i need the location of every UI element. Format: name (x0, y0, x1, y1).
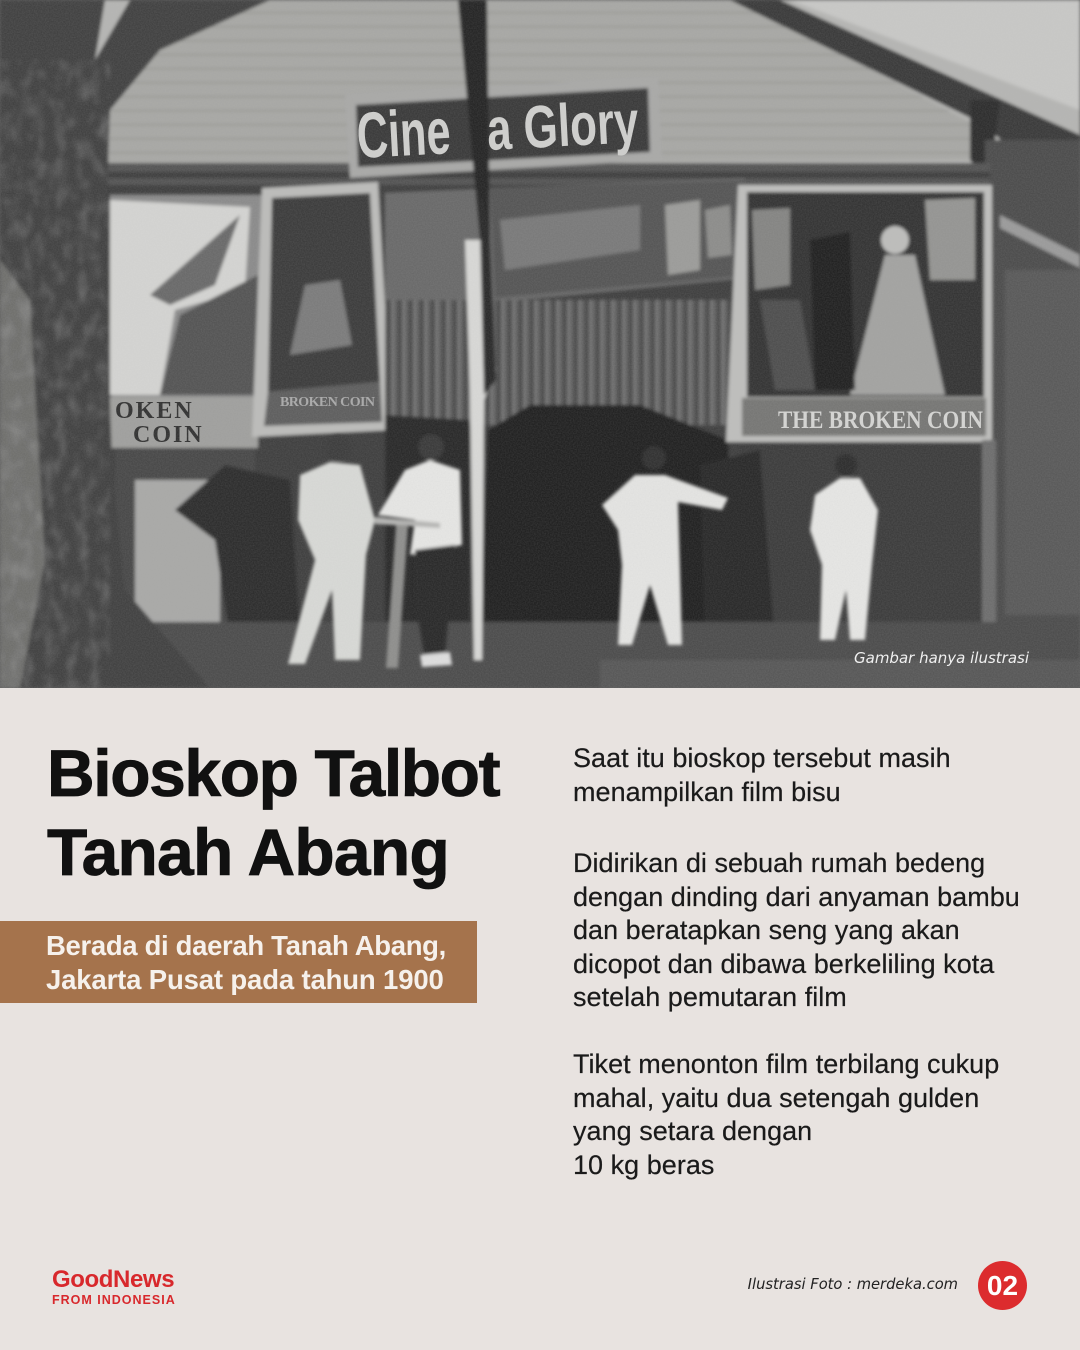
poster text: COIN (133, 422, 204, 448)
text block: ticket price: mahal, yaitu dua setengah gulden (573, 1083, 979, 1113)
photo credit: Ilustrasi Foto : merdeka.com (748, 1276, 958, 1293)
sign text (355, 89, 640, 172)
sign text: a Glory (485, 89, 640, 164)
text block: bamboo building (573, 848, 1020, 1012)
text block: silent film: menampilkan film bisu (573, 777, 841, 807)
sign (345, 77, 662, 178)
text block: ticket price: 10 kg beras (573, 1150, 714, 1180)
logo: GoodNews from Indonesia (52, 1266, 176, 1307)
text block: bamboo building: dicopot dan dibawa berkeliling kota (573, 949, 994, 979)
text block: silent film: Saat itu bioskop tersebut masih (573, 743, 951, 773)
poster text: OKEN (115, 398, 194, 424)
roof (730, 0, 1080, 215)
eaves (105, 163, 990, 187)
title: Tanah Abang (47, 815, 449, 889)
page number badge (978, 1261, 1027, 1310)
subtitle band: Berada di daerah Tanah Abang, (46, 930, 446, 961)
sign text: Cine (355, 94, 452, 172)
tree (0, 0, 270, 688)
text block: ticket price: yang setara dengan (573, 1116, 812, 1146)
logo: GoodNews from Indonesia: FROM INDONESIA (52, 1293, 176, 1307)
sky & wall (0, 0, 1080, 170)
man 2 (378, 460, 462, 555)
lower left panel (115, 450, 255, 640)
lower right panel (740, 445, 985, 635)
curtain (385, 300, 730, 425)
photo caption: Gambar hanya ilustrasi (854, 649, 1030, 667)
center banner (385, 178, 748, 303)
text block: silent film (573, 743, 951, 807)
ground (0, 622, 1080, 688)
subtitle band (0, 921, 477, 1003)
man 4 (810, 478, 878, 640)
photo: Cinema Glory building (0, 0, 1080, 688)
text block: bamboo building: dengan dinding dari anyaman bambu (573, 882, 1020, 912)
poster text: BROKEN COIN (280, 395, 375, 410)
lower wall (105, 185, 990, 645)
poster text (115, 395, 983, 448)
text block: bamboo building: Didirikan di sebuah rumah bedeng (573, 848, 985, 878)
text block: ticket price: Tiket menonton film terbilang cukup (573, 1049, 999, 1079)
left poster (110, 195, 262, 448)
right poster (726, 185, 992, 442)
text block: bamboo building: dan beratapkan seng yang akan (573, 915, 960, 945)
man 1 (288, 462, 375, 664)
subtitle band: Jakarta Pusat pada tahun 1900 (46, 964, 444, 994)
page number badge: 02 (987, 1270, 1018, 1301)
second poster (252, 182, 392, 437)
poster text: THE BROKEN COIN (778, 407, 983, 434)
title: Bioskop Talbot (47, 736, 499, 810)
logo: GoodNews from Indonesia: GoodNews (52, 1266, 174, 1293)
title (47, 736, 500, 890)
right wall (1005, 270, 1080, 615)
text block: bamboo building: setelah pemutaran film (573, 982, 847, 1012)
pole (458, 0, 490, 240)
man 3 (602, 475, 728, 645)
people (288, 434, 878, 668)
text block: ticket price (573, 1049, 999, 1180)
